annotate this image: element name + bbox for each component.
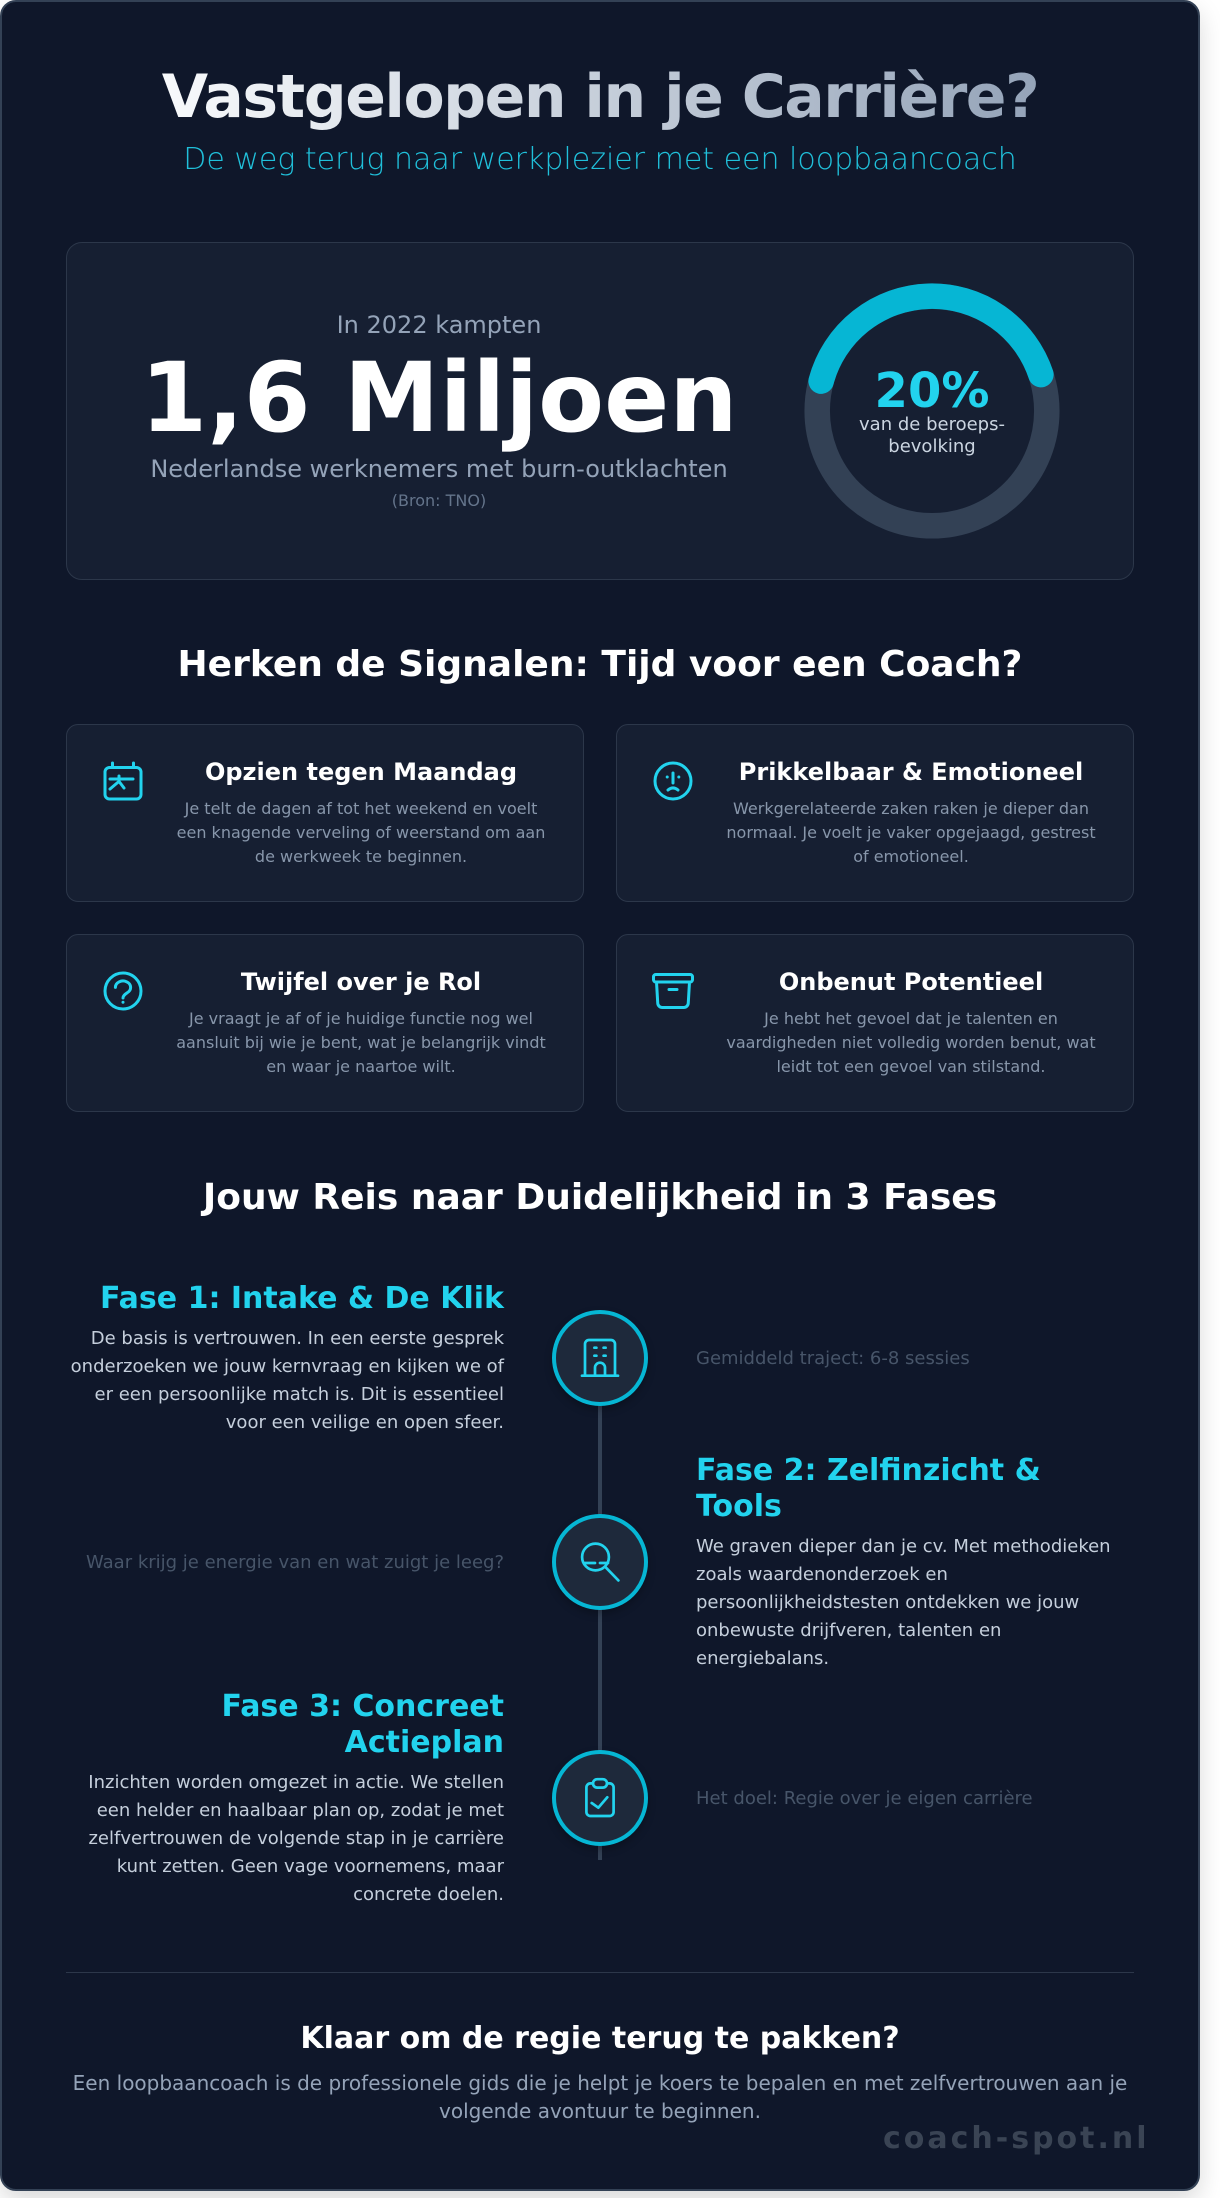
panel: Prikkelbaar & Emotioneel — [616, 724, 1134, 902]
card text: Je hebt het gevoel dat je talenten en — [764, 1009, 1058, 1028]
phase 2 text — [696, 1453, 1111, 1669]
closing text: Een loopbaancoach is de professionele gids die je helpt je koers te bepalen en met zelfvertrouwen aan je — [73, 2071, 1127, 2095]
phase 1 body: voor een veilige en open sfeer. — [226, 1412, 504, 1433]
card text — [726, 1009, 1096, 1076]
card text: Je vraagt je af of je huidige functie nog wel — [189, 1009, 533, 1028]
phase 2 body: zoals waardenonderzoek en — [696, 1564, 948, 1585]
source: (Bron: TNO) — [392, 491, 486, 510]
icon: building — [580, 1338, 620, 1377]
card heading: Onbenut Potentieel — [779, 968, 1043, 996]
timeline line — [598, 1357, 602, 1860]
phase 1 body — [71, 1328, 504, 1433]
phase 3 heading — [221, 1689, 504, 1760]
card text: Je telt de dagen af tot het weekend en voelt — [185, 799, 537, 818]
heading: signals: Herken de Signalen: Tijd voor een Coach? — [178, 644, 1022, 685]
phase 2 body: We graven dieper dan je cv. Met methodieken — [696, 1536, 1111, 1557]
card text: vaardigheden niet volledig worden benut, wat — [726, 1033, 1096, 1052]
phase 1 body: onderzoeken we jouw kernvraag en kijken we of — [71, 1356, 504, 1377]
icon: archive box — [652, 973, 694, 1009]
icon: question mark — [104, 972, 142, 1010]
card text: de werkweek te beginnen. — [255, 847, 467, 866]
phase 3 text — [88, 1689, 504, 1905]
closing text — [73, 2071, 1127, 2123]
icon: magnifier — [580, 1542, 620, 1582]
card text: Werkgerelateerde zaken raken je dieper dan — [733, 799, 1089, 818]
donut value: 20% — [875, 363, 989, 419]
closing text: volgende avontuur te beginnen. — [439, 2099, 761, 2123]
watermark: coach-spot.nl — [883, 2121, 1150, 2156]
phase 3 body: concrete doelen. — [353, 1884, 504, 1905]
phase 2 side note: Waar krijg je energie van en wat zuigt je leeg? — [86, 1552, 504, 1573]
card text — [176, 1009, 546, 1076]
phase 1 body: er een persoonlijke match is. Dit is essentieel — [94, 1384, 504, 1405]
phase 2 heading: Tools — [696, 1489, 782, 1524]
panel: Opzien tegen Maandag — [66, 724, 584, 902]
card text: of emotioneel. — [853, 847, 969, 866]
icon: clipboard check — [585, 1778, 615, 1818]
donut caption: van de beroeps- — [859, 414, 1005, 435]
card text: normaal. Je voelt je vaker opgejaagd, gestrest — [726, 823, 1096, 842]
phase 2 body — [696, 1536, 1111, 1669]
phase 3 body — [88, 1772, 504, 1905]
title: Vastgelopen in je Carrière? — [162, 62, 1038, 132]
phase 1 body: De basis is vertrouwen. In een eerste gesprek — [91, 1328, 504, 1349]
stat description: Nederlandse werknemers met burn-outklachten — [150, 455, 728, 483]
donut chart: 20 percent — [804, 283, 1060, 538]
icon: unhappy face — [654, 762, 692, 800]
card text: leidt tot een gevoel van stilstand. — [776, 1057, 1046, 1076]
card heading: Prikkelbaar & Emotioneel — [739, 758, 1083, 786]
phase 3 side note: Het doel: Regie over je eigen carrière — [696, 1788, 1033, 1809]
card text — [726, 799, 1096, 866]
phase 1 side note: Gemiddeld traject: 6-8 sessies — [696, 1348, 970, 1369]
subtitle: De weg terug naar werkplezier met een loopbaancoach — [183, 142, 1017, 177]
timeline badge: phase 2 — [552, 1514, 648, 1610]
timeline badge: phase 1 — [552, 1310, 648, 1406]
panel: burn-out statistic — [66, 242, 1134, 580]
card heading: Opzien tegen Maandag — [205, 758, 517, 786]
icon: calendar — [104, 762, 142, 800]
card text: aansluit bij wie je bent, wat je belangrijk vindt — [176, 1033, 546, 1052]
phase 3 body: een helder en haalbaar plan op, zodat je met — [97, 1800, 504, 1821]
phase 2 body: persoonlijkheidstesten ontdekken we jouw — [696, 1592, 1079, 1613]
big number: 1,6 Miljoen — [140, 342, 738, 454]
phase 3 heading: Fase 3: Concreet — [221, 1689, 504, 1724]
phase 1 heading: Fase 1: Intake & De Klik — [100, 1281, 504, 1316]
phase 3 body: zelfvertrouwen de volgende stap in je carrière — [88, 1828, 504, 1849]
panel: Onbenut Potentieel — [616, 934, 1134, 1112]
heading: journey: Jouw Reis naar Duidelijkheid in 3 Fases — [203, 1177, 997, 1218]
card text: een knagende verveling of weerstand om aan — [177, 823, 545, 842]
card heading: Twijfel over je Rol — [241, 968, 481, 996]
phase 2 body: energiebalans. — [696, 1648, 829, 1669]
donut caption — [859, 414, 1005, 456]
phase 3 body: kunt zetten. Geen vage voornemens, maar — [117, 1856, 504, 1877]
phase 2 body: onbewuste drijfveren, talenten en — [696, 1620, 1001, 1641]
closing heading: Klaar om de regie terug te pakken? — [300, 2021, 900, 2056]
card text: en waar je naartoe wilt. — [266, 1057, 456, 1076]
timeline badge: phase 3 — [552, 1750, 648, 1846]
phase 2 heading: Fase 2: Zelfinzicht & — [696, 1453, 1041, 1488]
panel: Twijfel over je Rol — [66, 934, 584, 1112]
card text — [177, 799, 545, 866]
phase 3 body: Inzichten worden omgezet in actie. We stellen — [88, 1772, 504, 1793]
stat intro: In 2022 kampten — [337, 311, 541, 339]
phase 1 text — [71, 1281, 504, 1433]
phase 3 heading: Actieplan — [345, 1725, 504, 1760]
phase 2 heading — [696, 1453, 1041, 1524]
donut caption: bevolking — [888, 436, 976, 456]
